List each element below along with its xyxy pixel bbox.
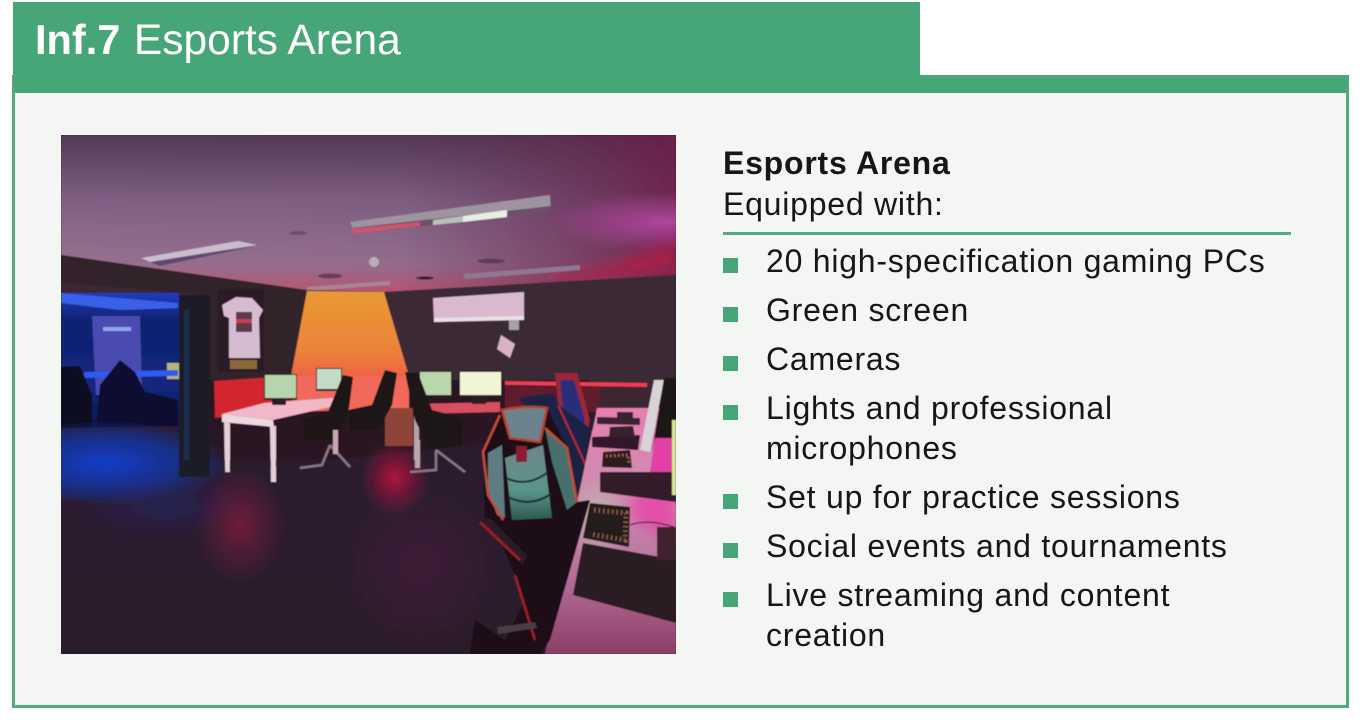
list item 4 [723,390,1113,466]
side monitors [640,380,664,452]
list item 3: Cameras [766,341,901,377]
red LED strip and back wall glow [214,376,647,446]
list item 4: microphones [766,430,958,466]
back row desks and monitors [222,368,502,482]
list item 2: Green screen [766,292,969,328]
text block: heading and equipment list [723,145,951,222]
heading: Esports Arena [723,145,951,181]
list item 4: Lights and professional [766,390,1113,426]
subheading: Equipped with: [723,186,944,222]
orange wall section [291,291,409,376]
framed t-shirt [218,290,264,372]
door pillar [179,295,210,477]
list item 7: Live streaming and content [766,577,1170,613]
list item 7: creation [766,617,886,653]
photo: esports arena room [61,135,676,654]
list item 6: Social events and tournaments [766,528,1228,564]
title banner [13,2,920,76]
front desk [545,378,676,654]
list item 7 [723,577,1170,653]
floor [0,421,600,654]
blue room doorway [61,293,179,433]
ceiling [61,135,780,300]
divider rule [723,232,1291,235]
air conditioner [433,292,524,358]
title: Inf.7 Esports Arena [35,16,401,64]
dark walls [61,255,676,460]
front gaming chair [470,407,590,654]
ceiling lights [141,195,580,291]
list item 1: 20 high-specification gaming PCs [766,243,1266,279]
list item 5: Set up for practice sessions [766,479,1181,515]
back row chairs [300,370,590,488]
